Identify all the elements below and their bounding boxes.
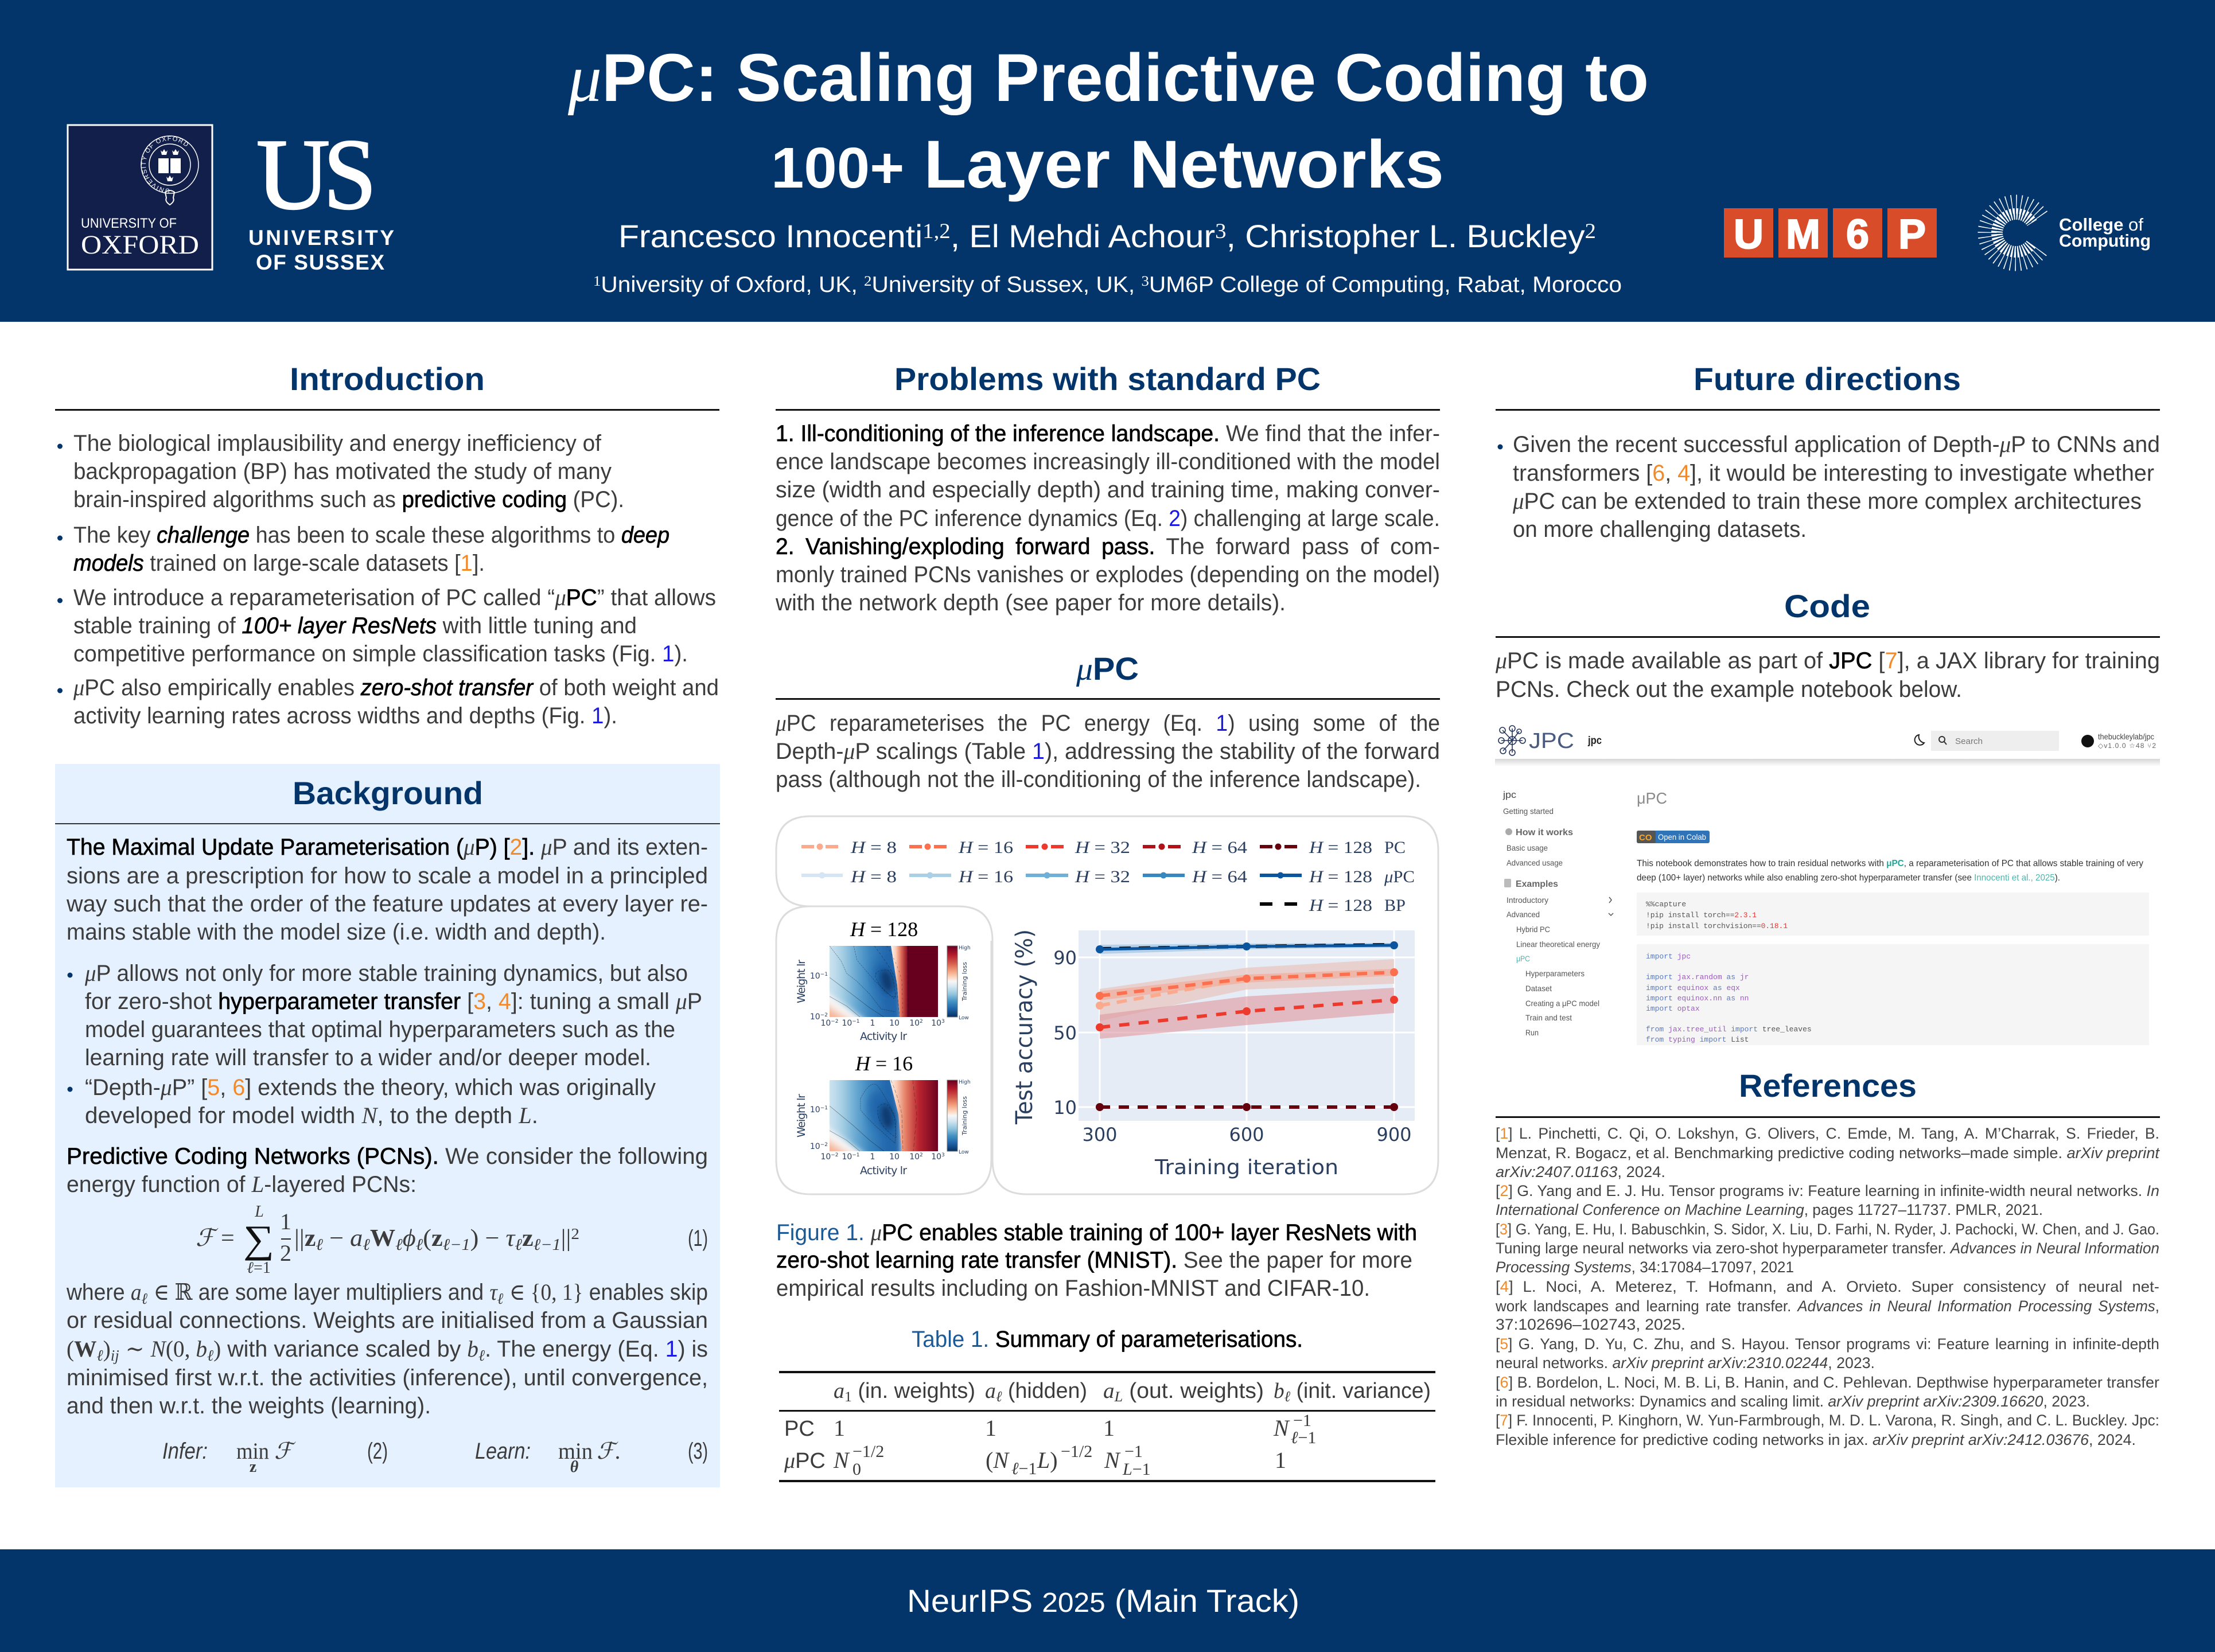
reference list: work landscapes and learning rate transfer. Advances in Neural Information Processing Systems,	[1495, 1298, 2159, 1315]
heatmap: H = 128: 10	[909, 1019, 920, 1028]
sidebar navigation: Examples	[1516, 879, 1558, 889]
text: problems description: with the network depth (see paper for more details).	[775, 590, 1286, 615]
notebook content: import jpc	[1646, 952, 1691, 961]
logo: University of Oxford	[67, 124, 213, 271]
logo: University of Sussex	[248, 119, 394, 274]
footer text: conference: NeurIPS 2025 (Main Track)	[907, 1583, 1299, 1619]
header banner	[0, 0, 2215, 322]
equation 1: energy function: =	[221, 1225, 235, 1252]
logo: College of Computing: Computing	[2059, 231, 2151, 251]
equations 2 and 3: infer and learn: Learn:	[475, 1439, 531, 1464]
heatmap: H = 16: 10	[842, 1152, 852, 1162]
text: problems description: 2. Vanishing/exploding forward pass. The forward pass of com-	[776, 534, 1440, 559]
panel: code	[1495, 588, 2160, 1045]
affiliations: 1University of Oxford, UK, 2University of Sussex, UK, 3UM6P College of Computing, Rabat, Morocco	[593, 272, 1622, 297]
heatmap: H = 128: −1	[820, 972, 828, 977]
notebook content: import optax	[1646, 1004, 1700, 1013]
bullet list: background: developed for model width N, to the depth L.	[85, 1102, 538, 1128]
heatmap: H = 128: 10	[931, 1019, 941, 1028]
bullet list: introduction: stable training of 100+ layer ResNets with little tuning and	[73, 613, 637, 638]
text: code description	[1495, 648, 2160, 702]
sidebar navigation: Dataset	[1525, 984, 1552, 993]
legend: H = 32	[1075, 838, 1130, 857]
notebook content: CO	[1639, 833, 1652, 843]
screenshot: JPC notebook: JPC	[1529, 729, 1574, 753]
equations 2 and 3: infer and learn: Infer:	[162, 1439, 208, 1464]
heatmap: H = 128: 2	[920, 1019, 923, 1024]
icon: JPC logo	[1498, 726, 1525, 755]
panel: future directions	[1496, 361, 2160, 542]
figure caption: Figure 1. μPC enables stable training of 100+ layer ResNets with	[776, 1219, 1417, 1245]
text: problems description: ence landscape becomes increasingly ill-conditioned with the model	[776, 449, 1440, 474]
equations 2 and 3: infer and learn: min	[558, 1438, 593, 1464]
reference list: Menzat, R. Bogacz, et al. Benchmarking predictive coding networks–made simple. arXiv preprint	[1496, 1144, 2160, 1162]
bullet list: background: “Depth-μP” [5, 6] extends the theory, which was originally	[85, 1074, 656, 1100]
logo: UM6P: M	[1786, 212, 1820, 258]
bullet list: introduction: competitive performance on simple classification tasks (Fig. 1).	[73, 641, 688, 667]
table: summary of parameterisations: N	[833, 1447, 850, 1473]
text: maximal update parameterisation: mains stable with the model size (i.e. width and depth).	[67, 919, 606, 945]
equations 2 and 3: infer and learn: (3)	[688, 1439, 708, 1464]
text: muPC description: Depth-μP scalings (Table 1), addressing the stability of the forward	[776, 738, 1440, 764]
text: code description: PCNs. Check out the example notebook below.	[1496, 677, 1962, 702]
legend: H = 128	[1309, 896, 1372, 915]
table: summary of parameterisations: 1	[1275, 1447, 1286, 1473]
heatmap: H = 128: Low	[959, 1015, 969, 1021]
sidebar navigation: jpc	[1502, 789, 1517, 800]
screenshot: JPC notebook: Search	[1955, 737, 1983, 746]
table: summary of parameterisations: −1/2	[1061, 1442, 1092, 1461]
table: summary of parameterisations: bℓ (init. variance)	[1274, 1379, 1431, 1405]
line chart: test accuracy vs training iteration: 300	[1082, 1124, 1118, 1146]
logo: UM6P: 6	[1846, 212, 1869, 258]
figure caption: empirical results including on Fashion-MNIST and CIFAR-10.	[776, 1276, 1370, 1301]
text: layer multipliers and weights: (Wℓ)ij ∼ N(0, bℓ) with variance scaled by bℓ. The energy (Eq. 1) is	[67, 1336, 708, 1364]
table: summary of parameterisations: PC	[784, 1417, 815, 1441]
text: maximal update parameterisation: The Maximal Update Parameterisation (μP) [2]. μP and its exten-	[67, 834, 708, 860]
bullet: future directions: transformers [6, 4], it would be interesting to investigate whether	[1513, 461, 2154, 486]
equation 1: energy function	[196, 1203, 708, 1277]
text: predictive coding networks: Predictive Coding Networks (PCNs). We consider the following	[67, 1144, 708, 1169]
reference list: neural networks. arXiv preprint arXiv:2310.02244, 2023.	[1496, 1354, 1875, 1372]
text: muPC description: pass (although not the ill-conditioning of the inference landscape).	[776, 767, 1421, 792]
legend: H = 128	[1309, 867, 1372, 886]
bullet list: introduction: The key challenge has been to scale these algorithms to deep	[73, 523, 669, 548]
line chart: test accuracy vs training iteration: Training iteration	[1154, 1156, 1338, 1179]
legend: H = 8	[850, 867, 897, 886]
text: maximal update parameterisation: sions are a prescription for how to scale a model in a principled	[67, 863, 708, 889]
table: summary of parameterisations: (N	[986, 1447, 1010, 1473]
notebook content: from jax.tree_util import tree_leaves	[1646, 1025, 1812, 1034]
equation 1: energy function: ℓ=1	[247, 1259, 271, 1277]
equation 1: energy function: 2	[280, 1240, 291, 1266]
heading: code: Code	[1784, 588, 1870, 624]
heatmap: H = 16: 3	[941, 1152, 945, 1158]
bullet list: background: μP allows not only for more stable training dynamics, but also	[84, 960, 688, 986]
heatmap: H = 16: 10	[931, 1152, 941, 1162]
heatmap: H = 128: 1	[870, 1019, 875, 1028]
text: layer multipliers and weights	[66, 1279, 708, 1419]
screenshot: JPC notebook	[1495, 726, 2160, 1045]
reference list: [6] B. Bordelon, L. Noci, M. B. Li, B. Hanin, and C. Pehlevan. Depthwise hyperparameter transfer	[1496, 1374, 2159, 1391]
table caption: Table 1. Summary of parameterisations.	[912, 1327, 1303, 1352]
heatmap: H = 16: H = 16	[855, 1052, 913, 1075]
legend: BP	[1384, 896, 1406, 915]
logo: UM6P: U	[1734, 212, 1764, 258]
heading: references: References	[1739, 1067, 1917, 1104]
text: maximal update parameterisation: way such that the order of the feature updates at every layer re-	[66, 891, 708, 917]
heatmap: H = 16: 10	[810, 1105, 820, 1115]
logo: University of Oxford: OXFORD	[81, 230, 199, 260]
bullet list: background: model guarantees that optimal hyperparameters such as the	[85, 1017, 675, 1042]
text: problems description: gence of the PC inference dynamics (Eq. 2) challenging at large scale.	[776, 506, 1440, 531]
equation 1: energy function: 1	[280, 1209, 291, 1234]
heading: problems: Problems with standard PC	[894, 361, 1321, 397]
figure caption	[776, 1219, 1417, 1301]
sidebar navigation: How it works	[1516, 828, 1573, 837]
notebook content: deep (100+ layer) networks while also enabling zero-shot hyperparameter transfer (see Innocenti et al., 2025).	[1637, 873, 2060, 883]
sidebar navigation: Getting started	[1503, 806, 1554, 816]
table: summary of parameterisations: 0	[852, 1460, 861, 1479]
line chart: test accuracy vs training iteration: 90	[1053, 947, 1077, 969]
reference list: [3] G. Yang, E. Hu, I. Babuschkin, S. Sidor, X. Liu, D. Farhi, N. Ryder, J. Pachocki, W. Chen, and J. Gao.	[1496, 1221, 2159, 1238]
sidebar navigation: Run	[1525, 1028, 1539, 1037]
figure 1	[776, 816, 1438, 1194]
legend: H = 16	[958, 867, 1013, 886]
line chart: test accuracy vs training iteration: 10	[1053, 1097, 1077, 1119]
logo: University of Oxford: UNIVERSITY OF	[81, 216, 177, 231]
equations 2 and 3: infer and learn: z	[250, 1458, 256, 1476]
legend: μPC	[1384, 867, 1415, 886]
logo: UM6P: P	[1898, 212, 1926, 258]
reference list: 37:102696–102743, 2025.	[1496, 1316, 1685, 1333]
sidebar navigation: Advanced	[1506, 910, 1540, 919]
heading: background: Background	[293, 775, 483, 811]
heatmap: H = 128: Training loss	[961, 962, 968, 1002]
table: summary of parameterisations: aL (out. weights)	[1103, 1379, 1264, 1405]
table: summary of parameterisations: −1/2	[852, 1442, 884, 1461]
logo: University of Sussex: U	[256, 119, 330, 231]
bullet list: introduction: activity learning rates across widths and depths (Fig. 1).	[73, 703, 617, 728]
panel: references	[1495, 1067, 2160, 1448]
sidebar navigation: Linear theoretical energy	[1516, 940, 1600, 949]
screenshot: JPC notebook: thebuckleylab/jpc	[2098, 732, 2154, 741]
bullet list: background: for zero-shot hyperparameter transfer [3, 4]: tuning a small μP	[85, 988, 702, 1014]
heatmap: H = 16: 10	[820, 1152, 831, 1162]
bullet list: introduction: brain-inspired algorithms such as predictive coding (PC).	[73, 487, 624, 512]
heatmap: H = 128: 10	[820, 1019, 831, 1028]
sidebar navigation: Basic usage	[1506, 843, 1548, 852]
reference list: [4] L. Noci, A. Meterez, T. Hofmann, and A. Orvieto. Super consistency of neural net-	[1496, 1278, 2159, 1295]
heatmap: H = 16: High	[959, 1080, 971, 1085]
reference list: [1] L. Pinchetti, C. Qi, O. Lokshyn, G. Olivers, C. Emde, M. Tang, A. M’Charrak, S. Frieder, B.	[1496, 1125, 2159, 1142]
legend: H = 16	[958, 838, 1013, 857]
bullet list: introduction	[57, 431, 719, 728]
heatmap: H = 128: −2	[831, 1019, 839, 1024]
text: muPC description	[775, 710, 1440, 792]
legend: PC	[1384, 838, 1406, 857]
bullet: future directions: on more challenging datasets.	[1513, 517, 1807, 542]
legend: H = 128	[1309, 838, 1372, 857]
reference list: Flexible inference for predictive coding networks in jax. arXiv preprint arXiv:2412.03676, 2024.	[1496, 1431, 2136, 1448]
reference list: Tuning large neural networks via zero-shot hyperparameter transfer. Advances in Neural Information	[1496, 1240, 2159, 1257]
heatmap: H = 16	[795, 1052, 971, 1177]
heatmap: H = 16: Training loss	[961, 1096, 968, 1136]
title: μPC: Scaling Predictive Coding to	[567, 40, 1649, 116]
table: summary of parameterisations: 1	[834, 1415, 845, 1441]
text: predictive coding networks: energy function of L-layered PCNs:	[67, 1171, 416, 1197]
heatmap: H = 16: −2	[820, 1142, 828, 1148]
footer banner	[0, 1549, 2215, 1652]
equations 2 and 3: infer and learn	[162, 1438, 708, 1476]
reference list: in residual networks: Dynamics and scaling limit. arXiv preprint arXiv:2309.16620, 2023.	[1496, 1393, 2090, 1410]
logo: University of Sussex: OF SUSSEX	[256, 251, 384, 274]
notebook content: import equinox as eqx	[1646, 984, 1740, 992]
table: summary of parameterisations: N	[1104, 1447, 1121, 1473]
heatmap: H = 16: −1	[852, 1152, 860, 1158]
screenshot: JPC notebook: jpc	[1587, 735, 1602, 747]
reference list: [5] G. Yang, D. Yu, C. Zhu, and S. Hayou. Tensor programs vi: Feature learning in infinite-depth	[1496, 1335, 2159, 1353]
notebook content: μPC	[1637, 789, 1667, 807]
heatmap: H = 16: Activity lr	[860, 1164, 907, 1177]
bullet list: introduction: μPC also empirically enables zero-shot transfer of both weight and	[73, 675, 719, 700]
heatmap: H = 128: 10	[810, 1012, 820, 1022]
sidebar navigation: Train and test	[1525, 1013, 1572, 1022]
notebook content: %%capture	[1646, 900, 1686, 909]
heatmap: H = 128: 10	[842, 1019, 852, 1028]
heatmap: H = 128: High	[959, 945, 971, 951]
reference list: arXiv:2407.01163, 2024.	[1496, 1163, 1665, 1180]
line chart: test accuracy vs training iteration: 900	[1376, 1124, 1412, 1146]
notebook content: !pip install torchvision==0.18.1	[1646, 922, 1788, 930]
notebook content: !pip install torch==2.3.1	[1646, 911, 1757, 919]
notebook content: Open in Colab	[1658, 832, 1706, 841]
legend: H = 64	[1192, 838, 1247, 857]
table: summary of parameterisations: −1	[1124, 1442, 1143, 1461]
panel: introduction	[55, 361, 719, 728]
heatmap: H = 16: 10	[889, 1152, 900, 1162]
heatmap: H = 16: 2	[920, 1152, 923, 1158]
text: layer multipliers and weights: where aℓ ∈ ℝ are some layer multipliers and τℓ ∈ {0, 1} enables skip	[66, 1279, 708, 1307]
line chart: test accuracy vs training iteration: 600	[1229, 1124, 1264, 1146]
notebook content	[1637, 789, 2149, 1045]
equations 2 and 3: infer and learn: min	[236, 1438, 269, 1464]
heatmap: H = 16: 1	[870, 1152, 875, 1162]
logo: College of Computing	[1987, 204, 2151, 262]
figure caption: zero-shot learning rate transfer (MNIST). See the paper for more	[776, 1248, 1412, 1273]
line chart: test accuracy vs training iteration: Test accuracy (%)	[1011, 929, 1038, 1125]
table: summary of parameterisations: ℓ−1	[1291, 1428, 1316, 1447]
notebook content: from typing import List	[1646, 1035, 1749, 1044]
text: problems description: monly trained PCNs vanishes or explodes (depending on the model)	[776, 562, 1440, 587]
sidebar navigation: Creating a μPC model	[1525, 999, 1599, 1008]
heatmap: H = 16: 10	[909, 1152, 920, 1162]
table: summary of parameterisations: ℓ−1	[1011, 1459, 1037, 1478]
heading: muPC: μPC	[1076, 650, 1139, 687]
line chart: test accuracy vs training iteration	[1011, 929, 1415, 1179]
notebook content: import jax.random as jr	[1646, 973, 1749, 981]
heading: future directions: Future directions	[1694, 361, 1961, 397]
equation 1: energy function: ||zℓ − aℓWℓϕℓ(zℓ−1) − τℓzℓ−1||2	[294, 1225, 579, 1254]
bullet list: introduction: The biological implausibility and energy inefficiency of	[73, 431, 602, 456]
line chart: test accuracy vs training iteration: 50	[1053, 1022, 1077, 1044]
table: summary of parameterisations: 1	[1103, 1415, 1115, 1441]
table: summary of parameterisations: aℓ (hidden)	[985, 1379, 1087, 1405]
equations 2 and 3: infer and learn: ℱ	[274, 1438, 296, 1464]
text: layer multipliers and weights: minimised first w.r.t. the activities (inference), until convergence,	[67, 1365, 708, 1390]
text: muPC description: μPC reparameterises the PC energy (Eq. 1) using some of the	[775, 710, 1440, 736]
screenshot: JPC notebook: ◇v1.0.0 ☆48 ⑂2	[2098, 742, 2156, 750]
panel: muPC	[775, 650, 1440, 1482]
bullet list: introduction: We introduce a reparameterisation of PC called “μPC” that allows	[73, 585, 716, 610]
equations 2 and 3: infer and learn: (2)	[367, 1439, 388, 1464]
sidebar navigation: Advanced usage	[1506, 858, 1563, 867]
legend	[801, 838, 1415, 915]
reference list: Processing Systems, 34:17084–17097, 2021	[1496, 1259, 1794, 1276]
text: predictive coding networks	[67, 1144, 708, 1197]
sidebar navigation: Hyperparameters	[1525, 969, 1585, 978]
text: code description: μPC is made available as part of JPC [7], a JAX library for training	[1495, 648, 2160, 673]
table: summary of parameterisations: L−1	[1122, 1460, 1151, 1479]
authors: Francesco Innocenti 1,2, El Mehdi Achour 3, Christopher L. Buckley 2	[618, 218, 1596, 254]
heatmap: H = 128: Activity lr	[860, 1030, 907, 1043]
text: layer multipliers and weights: or residual connections. Weights are initialised from a Gaussian	[67, 1308, 708, 1333]
table: summary of parameterisations: μPC	[784, 1449, 826, 1473]
equations 2 and 3: infer and learn: ℱ.	[597, 1438, 620, 1464]
table: summary of parameterisations: −1	[1293, 1411, 1311, 1430]
equation 1: energy function: ∑	[243, 1217, 274, 1261]
equation 1: energy function: (1)	[688, 1226, 708, 1251]
heatmap: H = 128: 3	[941, 1019, 945, 1024]
heatmap: H = 16: −2	[831, 1152, 839, 1158]
sidebar navigation: Hybrid PC	[1516, 925, 1550, 934]
table: summary of parameterisations: N	[1273, 1415, 1290, 1441]
heatmap: H = 128: Weight lr	[795, 960, 808, 1003]
logo: UM6P	[1724, 208, 1937, 258]
equation 1: energy function: L	[254, 1203, 264, 1221]
bullet list: background: learning rate will transfer to a wider and/or deeper model.	[85, 1045, 651, 1070]
reference list	[1495, 1125, 2160, 1448]
equation 1: energy function: ℱ	[196, 1224, 219, 1252]
panel: background	[55, 764, 720, 1487]
heatmap: H = 128: H = 128	[850, 918, 918, 941]
logo: University of Sussex: UNIVERSITY	[248, 226, 394, 250]
notebook content: import equinox.nn as nn	[1646, 994, 1749, 1003]
heatmap: H = 128: 10	[889, 1019, 900, 1028]
text: problems description: size (width and especially depth) and training time, making conver-	[776, 477, 1440, 502]
bullet: future directions: μPC can be extended to train these more complex architectures	[1512, 488, 2142, 514]
heatmap: H = 16: Weight lr	[795, 1094, 808, 1137]
equations 2 and 3: infer and learn: θ	[570, 1458, 579, 1476]
logo: University of Oxford: UNIVERSITY OF OXFORD	[141, 137, 188, 193]
notebook content: This notebook demonstrates how to train residual networks with μPC, a reparameterisation of PC that allows stable training of very	[1637, 859, 2143, 868]
table: summary of parameterisations: a1 (in. weights)	[834, 1379, 975, 1405]
table: summary of parameterisations: 1	[985, 1415, 996, 1441]
text: maximal update parameterisation	[66, 834, 708, 945]
reference list: [7] F. Innocenti, P. Kinghorn, W. Yun-Farmbrough, M. D. L. Varona, R. Singh, and C. L. Buckley. Jpc:	[1496, 1412, 2159, 1429]
text: problems description	[775, 421, 1440, 615]
panel: problems with standard PC	[775, 361, 1440, 615]
text: problems description: 1. Ill-conditioning of the inference landscape. We find that the infer-	[776, 421, 1440, 446]
sidebar navigation: μPC	[1516, 954, 1530, 963]
sidebar navigation	[1502, 789, 1613, 1037]
table: summary of parameterisations: L)	[1037, 1447, 1058, 1473]
text: layer multipliers and weights: and then w.r.t. the weights (learning).	[67, 1393, 431, 1419]
reference list: [2] G. Yang and E. J. Hu. Tensor programs iv: Feature learning in infinite-width neural networks. In	[1496, 1182, 2159, 1199]
bullet list: introduction: models trained on large-scale datasets [1].	[73, 551, 485, 576]
legend: H = 64	[1192, 867, 1247, 886]
heatmap: H = 16: 10	[810, 1142, 820, 1151]
logo: College of Computing: College of	[2059, 215, 2143, 235]
heatmap: H = 128: −2	[820, 1012, 828, 1018]
sidebar navigation: Introductory	[1506, 895, 1548, 905]
bullet list: background	[68, 960, 702, 1128]
legend: H = 32	[1075, 867, 1130, 886]
bullet list: introduction: backpropagation (BP) has motivated the study of many	[73, 459, 612, 484]
heatmap: H = 128: 10	[810, 972, 820, 981]
reference list: International Conference on Machine Learning, pages 11727–11737. PMLR, 2021.	[1496, 1201, 2043, 1218]
legend: H = 8	[850, 838, 897, 857]
heatmap: H = 16: Low	[959, 1150, 969, 1155]
logo: University of Sussex: S	[324, 119, 376, 231]
heatmap: H = 16: −1	[820, 1105, 828, 1111]
title: 100+ Layer Networks	[771, 127, 1444, 202]
title	[567, 40, 1649, 202]
bullet: future directions	[1497, 431, 2160, 542]
bullet: future directions: Given the recent successful application of Depth-μP to CNNs and	[1513, 431, 2160, 457]
heatmap: H = 128: −1	[852, 1019, 860, 1024]
heading: introduction: Introduction	[290, 361, 485, 397]
table: summary of parameterisations	[779, 1371, 1435, 1482]
heatmap: H = 128	[795, 918, 971, 1043]
